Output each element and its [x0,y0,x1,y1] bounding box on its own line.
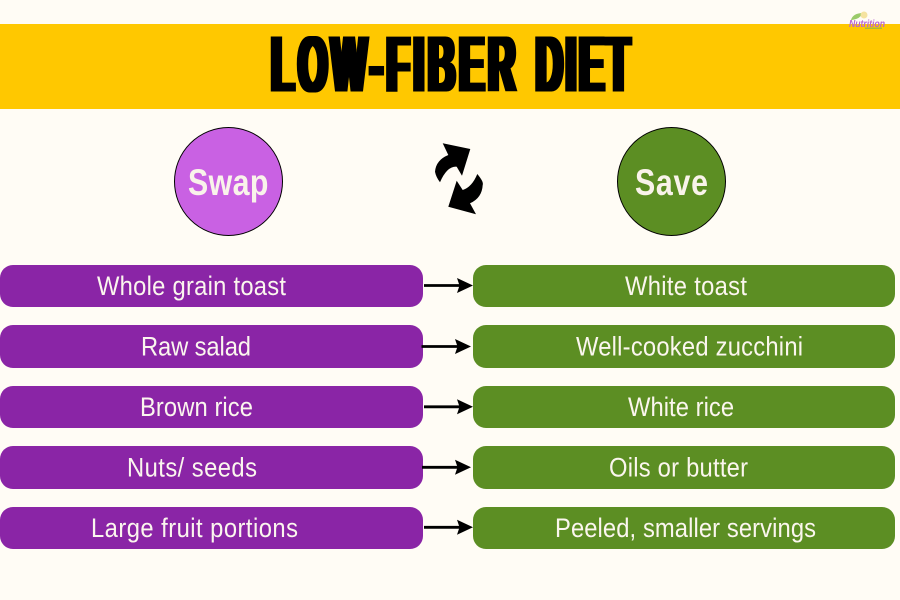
save row 5: Peeled, smaller servings [555,514,816,543]
arrow 3 [424,405,465,408]
save row 3: White rice [628,393,734,422]
swap row 3: Brown rice [140,393,253,422]
swap row 2: Raw salad [141,332,251,362]
save row 2 [473,325,895,368]
swap row 4: Nuts/ seeds [127,453,257,483]
save row 3 [473,386,895,428]
title banner [0,21,900,109]
icon: swap arrows [435,143,483,214]
title [271,21,630,109]
save row 1 [473,265,895,307]
save row 4: Oils or butter [609,453,749,483]
swap row 3 [0,386,423,428]
swap row 4 [0,446,423,489]
swap row 2 [0,325,423,368]
swap row 5 [0,507,423,549]
swap row 1: Whole grain toast [97,272,286,301]
arrow 1 [424,284,465,287]
save row 5 [473,507,895,549]
title: LOW-FIBER [271,21,515,109]
arrow 4 [422,466,463,469]
save circle [618,128,726,236]
save row 1: White toast [625,272,747,301]
swap circle: Swap [188,162,268,204]
save row 4 [473,446,895,489]
swap circle [174,128,282,236]
arrow 5 [424,526,465,529]
title: DIET [536,21,630,109]
save circle: Save [635,162,708,204]
arrow 2 [422,345,463,348]
save row 2: Well-cooked zucchini [576,332,803,362]
logo: Nutrition [849,19,885,30]
logo [849,12,885,30]
swap row 1 [0,265,423,307]
swap row 5: Large fruit portions [91,514,298,543]
